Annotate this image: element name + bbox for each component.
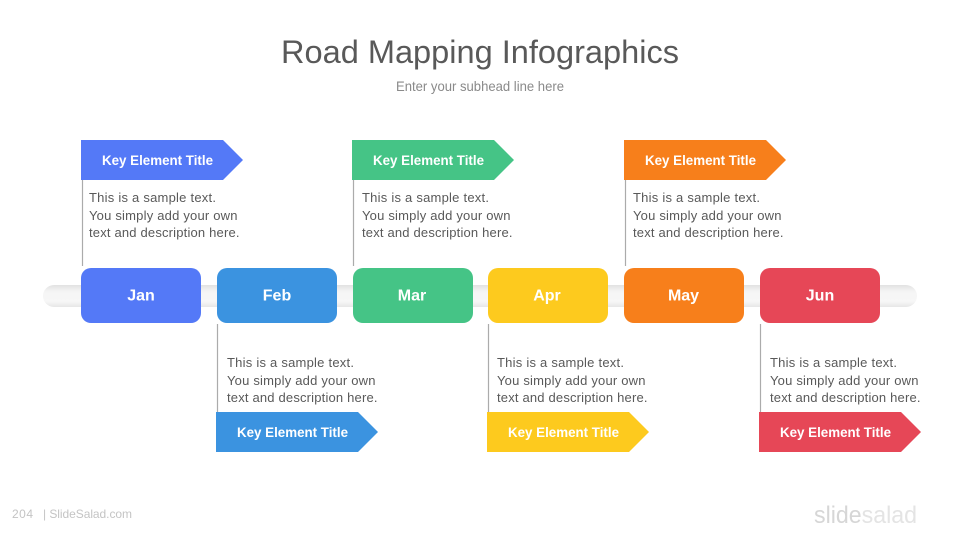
page number: 204 — [12, 507, 33, 521]
text block: March: text and description here. — [362, 225, 512, 240]
arrow banner: February: Key Element Title — [237, 424, 348, 440]
text block: April — [497, 355, 648, 405]
text block: February: This is a sample text. — [227, 355, 354, 370]
month box: Mar — [353, 268, 473, 323]
text block: January: You simply add your own — [89, 208, 238, 223]
text block: February — [227, 355, 378, 405]
panel: March milestone — [352, 140, 514, 323]
arrow banner: May — [624, 140, 786, 180]
text block: January: text and description here. — [89, 225, 240, 240]
arrow banner: June: Key Element Title — [780, 424, 891, 440]
text block: April: text and description here. — [497, 390, 648, 405]
month box: Jun: Jun — [806, 288, 834, 304]
panel: May milestone — [624, 140, 786, 323]
month box: Feb: Feb — [263, 288, 291, 304]
text block: April: You simply add your own — [497, 373, 646, 388]
text block: June: text and description here. — [770, 390, 920, 405]
arrow banner: February — [216, 412, 378, 452]
text block: February: text and description here. — [227, 390, 378, 405]
text block: June: This is a sample text. — [770, 355, 897, 370]
panel: February milestone — [216, 268, 378, 452]
text block: May: text and description here. — [633, 225, 784, 240]
text block: June: You simply add your own — [770, 373, 918, 388]
connector line: May — [624, 180, 626, 266]
text block: January: This is a sample text. — [89, 190, 216, 205]
timeline track — [43, 285, 917, 307]
month box: Apr: Apr — [533, 288, 561, 304]
month box: May — [624, 268, 744, 323]
panel: April milestone — [487, 268, 649, 452]
title: Road Mapping Infographics — [281, 34, 679, 70]
subtitle: Enter your subhead line here — [396, 78, 564, 94]
arrow banner: May: Key Element Title — [645, 152, 756, 168]
text block: May: You simply add your own — [633, 208, 782, 223]
month box: May: May — [668, 288, 699, 304]
text block: February: You simply add your own — [227, 373, 376, 388]
text block: April: This is a sample text. — [497, 355, 624, 370]
text block: June — [770, 355, 920, 405]
arrow banner: January: Key Element Title — [102, 152, 213, 168]
arrow banner: June — [759, 412, 921, 452]
text block: May: This is a sample text. — [633, 190, 760, 205]
month box: Jan — [81, 268, 201, 323]
logo wordmark: slidesalad — [814, 502, 917, 529]
arrow banner: March: Key Element Title — [373, 152, 484, 168]
month box: Jan: Jan — [127, 288, 155, 304]
connector line: April — [488, 324, 490, 412]
connector line: January — [82, 180, 84, 266]
footer source: | SlideSalad.com — [43, 507, 132, 521]
arrow banner: March — [352, 140, 514, 180]
text block: May — [633, 190, 784, 240]
connector line: June — [760, 324, 762, 412]
arrow banner: January — [81, 140, 243, 180]
text block: March: This is a sample text. — [362, 190, 489, 205]
text block: March: You simply add your own — [362, 208, 510, 223]
month box: Jun — [760, 268, 880, 323]
text block: January — [89, 190, 240, 240]
month box: Apr — [488, 268, 608, 323]
month box: Feb — [217, 268, 337, 323]
panel: June milestone — [759, 268, 921, 452]
text block: March — [362, 190, 512, 240]
connector line: February — [216, 324, 218, 412]
connector line: March — [352, 180, 354, 266]
arrow banner: April: Key Element Title — [508, 424, 619, 440]
panel: January milestone — [81, 140, 243, 323]
month box: Mar: Mar — [398, 288, 426, 304]
arrow banner: April — [487, 412, 649, 452]
